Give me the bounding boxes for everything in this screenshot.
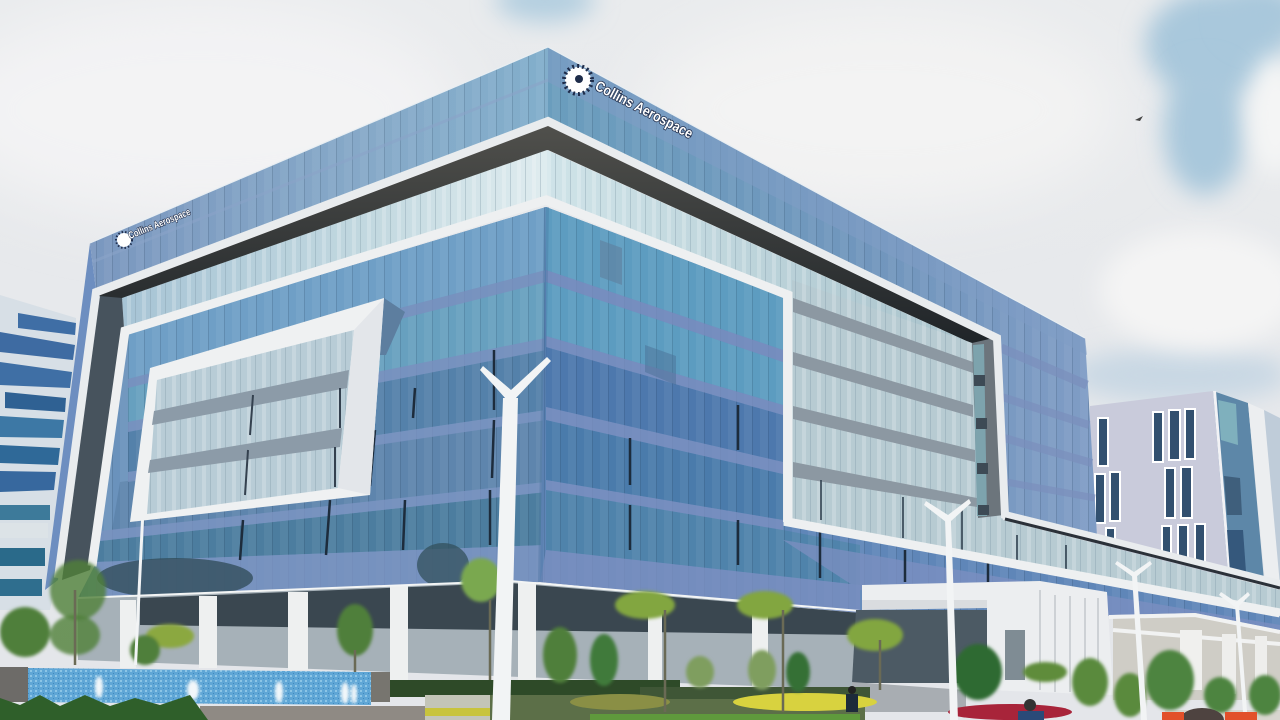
- distant building left: [0, 295, 76, 610]
- colonnade glass: [78, 581, 860, 690]
- lower glass right face: [540, 207, 1280, 636]
- lamp: third: [1115, 561, 1152, 720]
- hedges: [390, 680, 680, 697]
- stone walls: [0, 667, 28, 702]
- sign: right facade: [564, 66, 695, 142]
- landscaping: [0, 558, 1280, 720]
- icon: sunburst logo: [564, 66, 592, 94]
- ground floor: [78, 581, 860, 690]
- icon: small sunburst logo: [116, 232, 132, 248]
- white soffit edge: [78, 581, 860, 611]
- sign: left facade: Collins Aerospace: [127, 207, 193, 242]
- top band left face: [90, 47, 548, 290]
- white outer frame: [58, 121, 1280, 584]
- lamp: second: [924, 499, 971, 720]
- lower glass left face: [78, 207, 546, 598]
- person: [846, 686, 858, 712]
- right window panel: [792, 280, 1280, 613]
- lawn: [590, 714, 860, 720]
- white column: [1248, 403, 1280, 585]
- columns: [120, 582, 768, 690]
- sign: right facade: Collins Aerospace: [592, 78, 695, 142]
- lamp: fourth: [1219, 592, 1250, 712]
- floor bands right face: [540, 270, 1280, 640]
- head in foreground: [1180, 708, 1224, 720]
- person in foreground: [1018, 699, 1044, 720]
- street lamps: [134, 357, 1250, 720]
- right wing ground floor: [1109, 613, 1280, 700]
- tree reflections: [97, 558, 253, 598]
- square frame: [130, 298, 405, 522]
- fountain pool: [0, 667, 425, 720]
- grey bands of panel: [793, 298, 977, 507]
- recess underside: [98, 126, 993, 344]
- kerb: [425, 708, 490, 716]
- stone base: [200, 706, 425, 720]
- strip mullions: [821, 480, 1066, 575]
- barriers: [1162, 712, 1184, 720]
- glass strip left: [122, 150, 547, 328]
- left dark recess: [62, 296, 124, 580]
- glass strip right: [547, 150, 975, 360]
- top band right face: [548, 47, 1097, 535]
- distant building right: [1090, 391, 1280, 585]
- windows: [1095, 409, 1205, 565]
- lamp: small left: [134, 520, 144, 665]
- trees: [0, 558, 1280, 717]
- glass tower: [1213, 391, 1264, 580]
- tiled wall: [28, 668, 371, 705]
- grey side return: [972, 337, 1004, 518]
- white inner frame: [92, 200, 1280, 613]
- entrance canopy: [852, 581, 1113, 712]
- dark panes left face: [240, 350, 494, 560]
- dark panes right face: [630, 405, 988, 582]
- yellow flowers: [733, 693, 877, 711]
- tree trunks: [75, 590, 880, 712]
- floor bands left face: [96, 270, 546, 598]
- sign: left facade: [116, 207, 193, 248]
- water jets: [95, 676, 357, 704]
- roof edge highlight: [90, 47, 1085, 338]
- left outer wall: [45, 243, 96, 590]
- bushes front: [0, 695, 208, 720]
- wall: [1090, 391, 1230, 580]
- red flowers: [948, 704, 1072, 720]
- corner shade: [538, 207, 549, 582]
- lamp: large foreground: [480, 357, 551, 720]
